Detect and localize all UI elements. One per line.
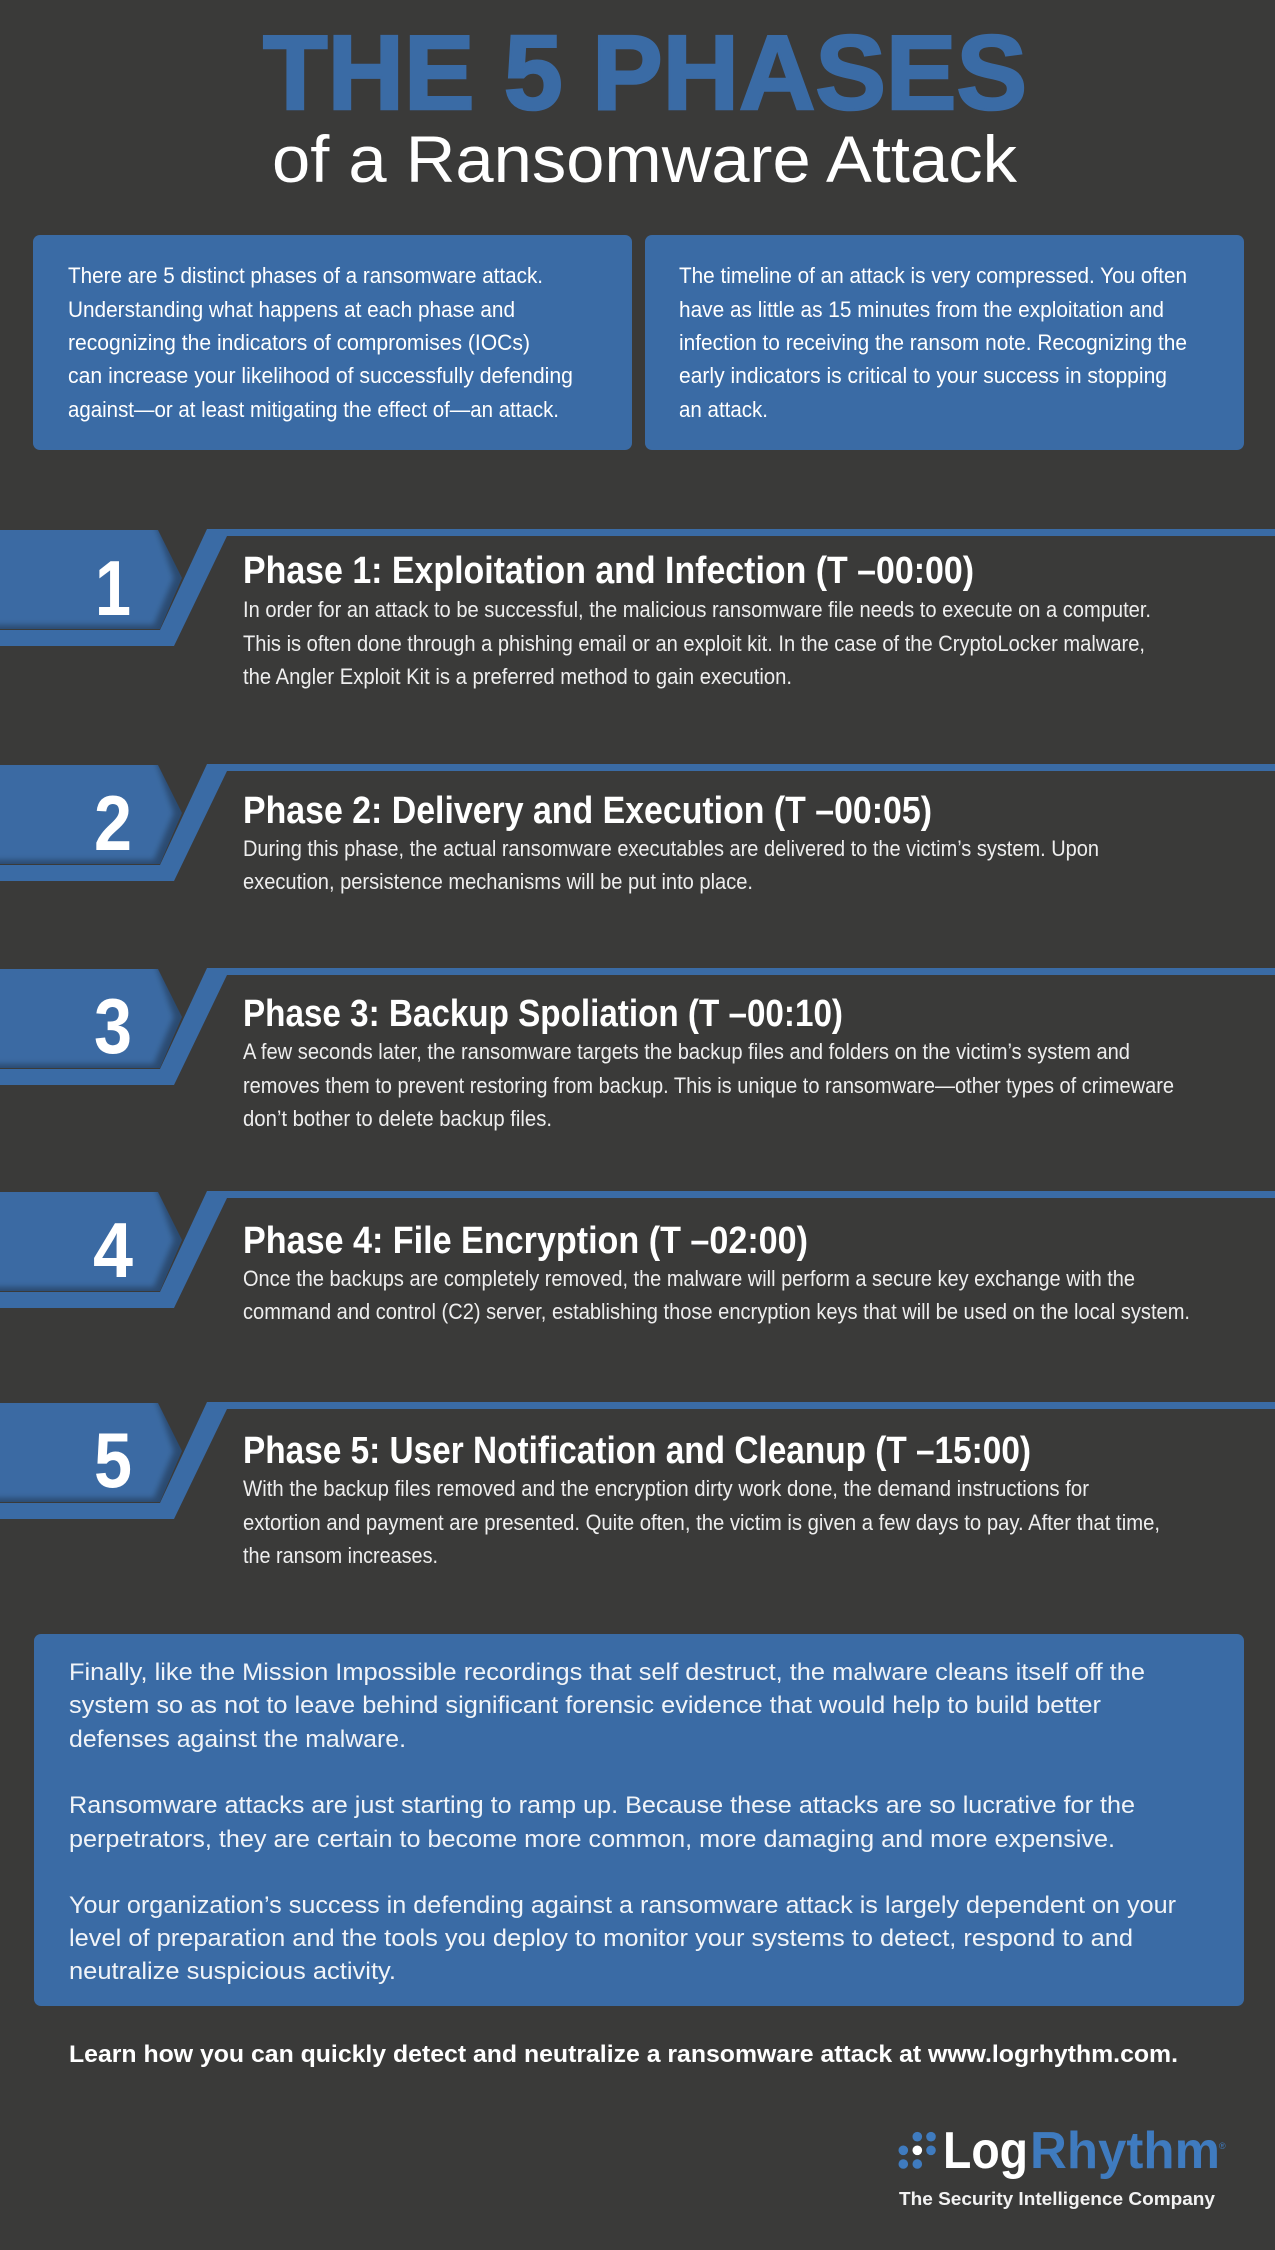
panel: phase 5 [0, 1402, 1275, 1563]
panel: conclusion: Ransomware attacks are just starting to ramp up. Because these attacks are so lucrative for the [69, 1792, 1135, 1819]
phase 1 banner with number [0, 529, 1275, 646]
panel: conclusion: system so as not to leave behind significant forensic evidence that would help to build better [69, 1692, 1101, 1719]
logo: LogRhythm [898, 2122, 1226, 2209]
phase 2 heading: Phase 2: Delivery and Execution (T –00:05) [243, 790, 932, 832]
panel: conclusion: Your organization’s success in defending against a ransomware attack is largely dependent on your [69, 1892, 1176, 1919]
phase 4 description [243, 1266, 1190, 1324]
phase 3 heading: Phase 3: Backup Spoliation (T –00:10) [243, 993, 843, 1035]
panel: conclusion: level of preparation and the tools you deploy to monitor your systems to detect, respond to and [69, 1925, 1133, 1952]
phase 3 banner with number [0, 968, 1275, 1085]
phase 1 banner with number: 1 [95, 544, 131, 632]
phase 3 banner with number: 3 [94, 982, 132, 1070]
phase 5 banner with number [0, 1402, 1275, 1519]
panel: intro left: There are 5 distinct phases of a ransomware attack. [68, 263, 543, 288]
panel: conclusion: perpetrators, they are certain to become more common, more damaging and more expensive. [69, 1826, 1115, 1853]
call to action: Learn how you can quickly detect and neutralize a ransomware attack at www.logrhythm.com. [69, 2041, 1178, 2068]
panel: intro left: recognizing the indicators of compromises (IOCs) [68, 330, 530, 355]
phase 1 description [243, 597, 1151, 689]
title [263, 14, 1027, 196]
phase 5 banner with number: 5 [94, 1416, 132, 1504]
phase 5 description [243, 1476, 1160, 1568]
logo: LogRhythm: ® [1219, 2141, 1226, 2151]
title: THE 5 PHASES [263, 14, 1027, 132]
panel: conclusion: defenses against the malware. [69, 1726, 406, 1753]
logo: LogRhythm: The Security Intelligence Company [899, 2189, 1215, 2209]
phase 2 banner with number: 2 [94, 779, 132, 867]
phase 5 description: the ransom increases. [243, 1543, 438, 1568]
phase 4 banner with number: 4 [93, 1206, 133, 1294]
phase 3 description: don’t bother to delete backup files. [243, 1106, 552, 1131]
phase 4 banner with number [0, 1191, 1275, 1308]
icon: logo dots [898, 2132, 936, 2169]
panel: intro left: can increase your likelihood of successfully defending [68, 363, 573, 388]
phase 5 heading: Phase 5: User Notification and Cleanup (T –15:00) [243, 1430, 1031, 1472]
panel: intro right [645, 235, 1244, 450]
phase 5 description: With the backup files removed and the encryption dirty work done, the demand instructions for [243, 1476, 1089, 1501]
panel: conclusion [34, 1634, 1244, 2006]
phase 4 description: Once the backups are completely removed, the malware will perform a secure key exchange with the [243, 1266, 1135, 1291]
panel: phase 2 [0, 764, 1275, 894]
phase 1 description: This is often done through a phishing email or an exploit kit. In the case of the CryptoLocker malware, [243, 631, 1145, 656]
phase 4 description: command and control (C2) server, establishing those encryption keys that will be used on the local system. [243, 1299, 1190, 1324]
phase 2 description: During this phase, the actual ransomware executables are delivered to the victim’s system. Upon [243, 836, 1099, 861]
phase 1 description: In order for an attack to be successful, the malicious ransomware file needs to execute on a computer. [243, 597, 1151, 622]
phase 2 description: execution, persistence mechanisms will be put into place. [243, 869, 753, 894]
panel: intro right: an attack. [679, 397, 768, 422]
panel: conclusion: neutralize suspicious activity. [69, 1958, 396, 1985]
panel: intro right: early indicators is critical to your success in stopping [679, 363, 1167, 388]
panel: phase 4 [0, 1191, 1275, 1324]
panel: intro right: infection to receiving the ransom note. Recognizing the [679, 330, 1187, 355]
panel: intro left: against—or at least mitigating the effect of—an attack. [68, 397, 559, 422]
panel: intro right: The timeline of an attack is very compressed. You often [679, 263, 1187, 288]
phase 3 description [243, 1039, 1174, 1131]
phase 3 description: A few seconds later, the ransomware targets the backup files and folders on the victim’s system and [243, 1039, 1130, 1064]
phase 2 banner with number [0, 764, 1275, 881]
phase 1 description: the Angler Exploit Kit is a preferred method to gain execution. [243, 664, 792, 689]
logo: LogRhythm: Log [943, 2122, 1028, 2180]
panel: intro right: have as little as 15 minutes from the exploitation and [679, 297, 1164, 322]
panel: phase 1 [0, 529, 1275, 688]
phase 5 description: extortion and payment are presented. Quite often, the victim is given a few days to pay. After that time, [243, 1510, 1160, 1535]
phase 3 description: removes them to prevent restoring from backup. This is unique to ransomware—other types of crimeware [243, 1073, 1174, 1098]
phase 2 description [243, 836, 1099, 894]
panel: conclusion: Finally, like the Mission Impossible recordings that self destruct, the malware cleans itself off the [69, 1659, 1145, 1686]
title: of a Ransomware Attack [272, 122, 1018, 196]
panel: intro left [33, 235, 632, 450]
phase 1 heading: Phase 1: Exploitation and Infection (T –00:00) [243, 550, 974, 592]
panel: intro left: Understanding what happens at each phase and [68, 297, 515, 322]
phase 4 heading: Phase 4: File Encryption (T –02:00) [243, 1220, 808, 1262]
panel: phase 3 [0, 968, 1275, 1130]
logo: LogRhythm: Rhythm [1030, 2122, 1220, 2180]
